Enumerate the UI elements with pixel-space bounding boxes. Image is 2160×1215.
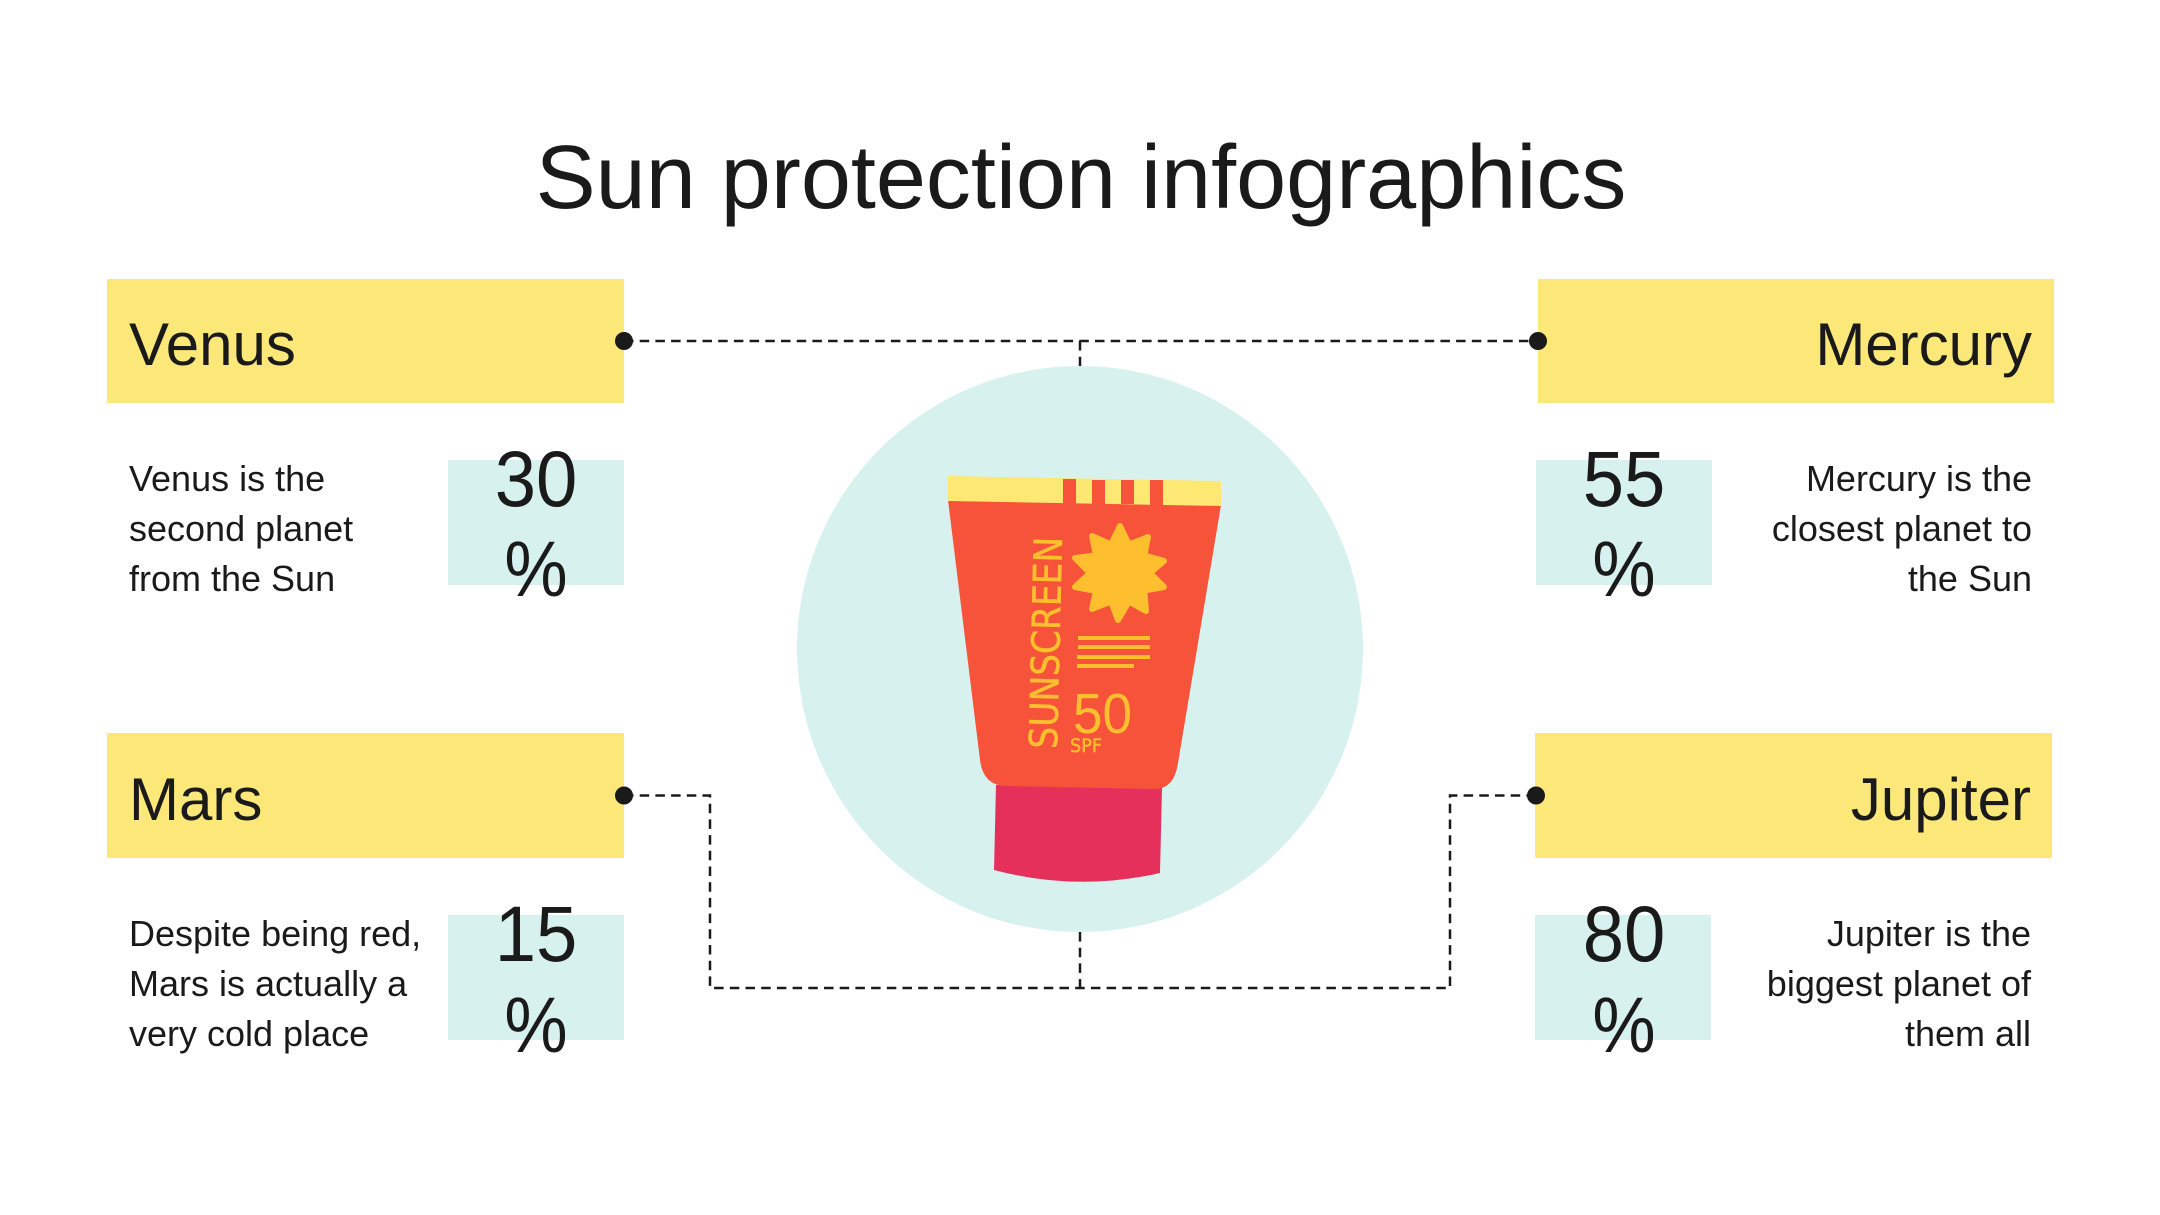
percent value: 80	[1583, 891, 1665, 979]
percent box	[448, 915, 624, 1040]
heading: Jupiter	[1851, 766, 2031, 833]
crimp stripes	[1063, 479, 1163, 505]
connector dot	[615, 332, 633, 350]
percent box	[1535, 915, 1711, 1040]
description: second planet	[129, 508, 353, 549]
panel: Venus	[107, 279, 633, 613]
percent value: %	[504, 525, 568, 613]
connector dot	[1529, 332, 1547, 350]
description: biggest planet of	[1767, 963, 2032, 1004]
icon: sunscreen tube	[948, 476, 1221, 882]
heading: Mercury	[1815, 311, 2032, 378]
description	[129, 913, 421, 1054]
percent box	[1536, 460, 1712, 585]
tube cap	[994, 785, 1162, 882]
description: very cold place	[129, 1013, 369, 1054]
description: Mercury is the	[1806, 458, 2032, 499]
description: Jupiter is the	[1827, 913, 2031, 954]
description: Despite being red,	[129, 913, 421, 954]
heading: Mars	[129, 766, 262, 833]
percent value: 55	[1583, 436, 1665, 524]
percent value: %	[1592, 525, 1656, 613]
description: Mars is actually a	[129, 963, 408, 1004]
percent value	[495, 891, 577, 1069]
percent value: %	[1592, 981, 1656, 1069]
brand text: SUNSCREEN	[1022, 536, 1072, 749]
percent value	[1583, 891, 1665, 1069]
description	[1767, 913, 2032, 1054]
percent value: %	[504, 981, 568, 1069]
SPF number: 50	[1073, 682, 1132, 746]
description	[1772, 458, 2032, 599]
heading bar	[1535, 733, 2052, 858]
connector: bottom	[624, 796, 1536, 988]
connector: top	[624, 341, 1538, 366]
description: Venus is the	[129, 458, 325, 499]
connector dot	[1527, 786, 1545, 804]
heading bar	[1538, 279, 2054, 403]
heading bar	[107, 279, 624, 403]
percent value	[495, 436, 577, 613]
panel: Mars	[107, 733, 633, 1069]
description: them all	[1905, 1013, 2031, 1054]
percent value: 30	[495, 436, 577, 524]
description	[129, 458, 353, 599]
description: closest planet to	[1772, 508, 2032, 549]
percent value: 15	[495, 891, 577, 979]
product label lines	[1077, 636, 1150, 668]
percent box	[448, 460, 624, 585]
tube body	[948, 500, 1221, 789]
description: the Sun	[1908, 558, 2032, 599]
tube crimp band	[948, 476, 1221, 506]
connector dot	[615, 786, 633, 804]
central circle	[797, 366, 1363, 932]
description: from the Sun	[129, 558, 335, 599]
heading: Venus	[129, 311, 296, 378]
title: Sun protection infographics	[536, 128, 1626, 228]
percent value	[1583, 436, 1665, 613]
panel: Jupiter	[1527, 733, 2052, 1069]
heading bar	[107, 733, 624, 858]
panel: Mercury	[1529, 279, 2054, 613]
SPF label: SPF	[1070, 735, 1102, 757]
icon: sun	[1075, 526, 1164, 620]
